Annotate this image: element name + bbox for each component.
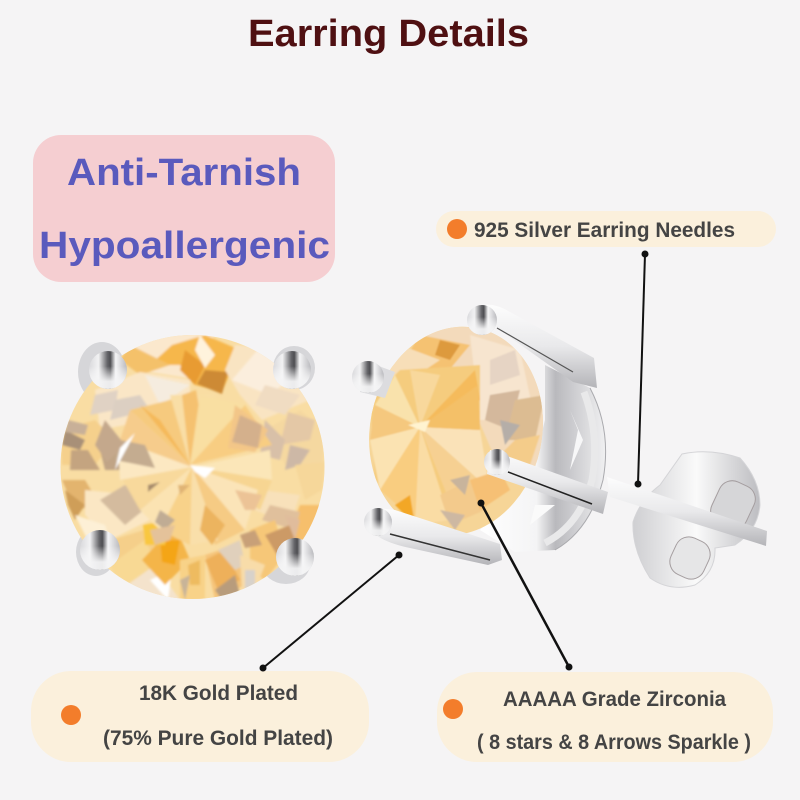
front view earring bbox=[60, 330, 330, 600]
prong backs bbox=[76, 342, 315, 584]
callout: zirconia grade: ( 8 stars & 8 Arrows Sparkle ) bbox=[477, 731, 751, 754]
claim: anti-tarnish: Anti-Tarnish bbox=[67, 152, 301, 194]
callout: 18K gold plated: 18K Gold Plated bbox=[139, 682, 298, 705]
side gem facets bbox=[370, 327, 543, 530]
title: Earring Details bbox=[248, 13, 529, 55]
needle bbox=[607, 477, 767, 546]
setting cup bbox=[480, 365, 606, 552]
prong: bottom bbox=[364, 508, 502, 565]
callout: 925 silver needles: 925 Silver Earring Needles bbox=[474, 219, 735, 242]
central star facets bbox=[130, 395, 190, 465]
callout: 18K gold plated: (75% Pure Gold Plated) bbox=[103, 727, 333, 750]
prong: front bbox=[484, 449, 608, 514]
panel: claims bbox=[33, 135, 335, 282]
prong balls bbox=[80, 351, 314, 576]
callout: 925 silver needles bbox=[436, 211, 776, 488]
side view earring bbox=[350, 305, 767, 587]
prong: top bbox=[467, 305, 597, 388]
butterfly back bbox=[633, 452, 760, 587]
prong: back left bbox=[352, 361, 395, 398]
outer facets bbox=[60, 330, 330, 600]
callout: zirconia grade bbox=[437, 500, 773, 762]
callout: 18K gold plated bbox=[31, 552, 402, 762]
callout: zirconia grade: AAAAA Grade Zirconia bbox=[503, 688, 726, 711]
claim: hypoallergenic: Hypoallergenic bbox=[39, 225, 330, 267]
side gem bbox=[350, 310, 562, 552]
